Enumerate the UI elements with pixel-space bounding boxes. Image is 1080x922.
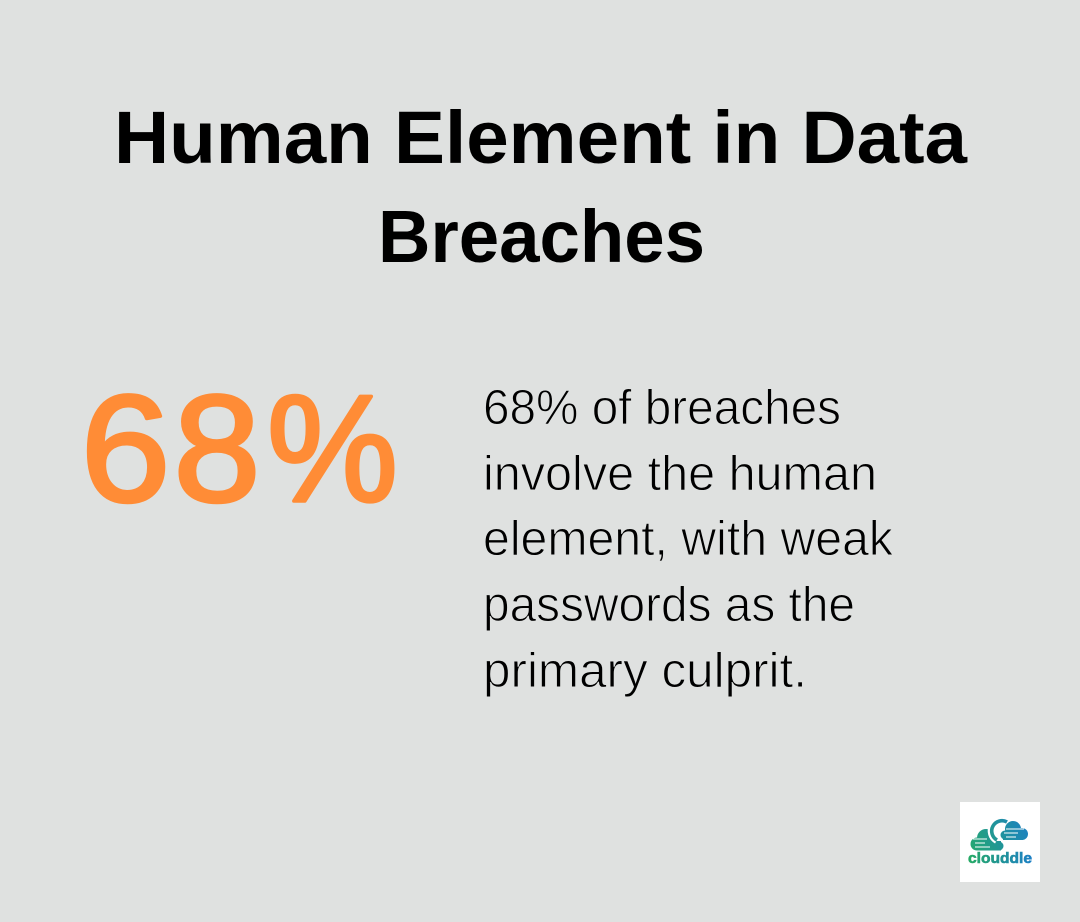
big stat: 68%	[80, 364, 398, 534]
description text: involve the human	[483, 447, 877, 501]
icon: clouds	[970, 821, 1028, 850]
title: Breaches	[378, 195, 705, 278]
logo: clouddle	[960, 802, 1040, 882]
big stat: 68%: 8	[174, 364, 260, 534]
description text: element, with weak	[483, 512, 893, 566]
logo wordmark: clouddle	[968, 850, 1032, 867]
title: Human Element in Data	[114, 96, 968, 179]
description text	[483, 381, 893, 698]
big stat: 68%: %	[267, 364, 398, 534]
title	[114, 96, 968, 278]
big stat: 68%: 6	[80, 364, 170, 534]
description text: primary culprit.	[483, 644, 807, 698]
description text: passwords as the	[483, 578, 855, 632]
description text: 68% of breaches	[483, 381, 841, 435]
